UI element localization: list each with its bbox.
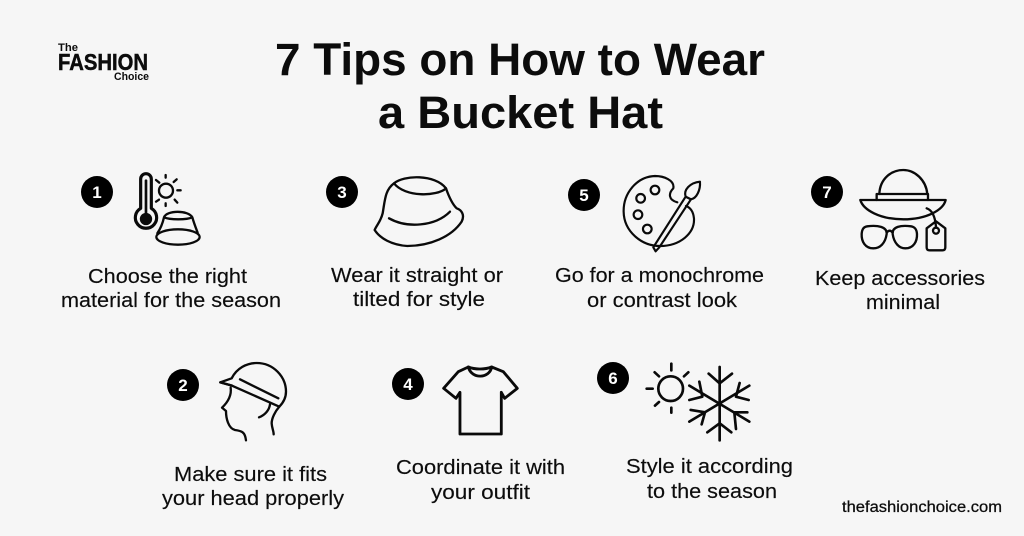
number badge 1 bbox=[81, 176, 113, 208]
logo: The Fashion Choice: FASHION bbox=[58, 49, 148, 75]
label: Make sure it fits bbox=[174, 463, 327, 486]
label: material for the season bbox=[61, 289, 281, 312]
label bbox=[61, 265, 281, 312]
title: a Bucket Hat bbox=[378, 87, 663, 138]
icon: hat, sunglasses and tag bbox=[860, 170, 946, 250]
label: or contrast look bbox=[587, 289, 738, 312]
label: Keep accessories bbox=[815, 267, 985, 290]
label bbox=[331, 264, 503, 311]
label bbox=[396, 456, 565, 504]
icon: t-shirt bbox=[444, 367, 517, 434]
tip 2: make sure it fits bbox=[162, 363, 345, 510]
number badge 6 bbox=[597, 362, 629, 394]
label: Wear it straight or bbox=[331, 264, 503, 287]
label bbox=[162, 463, 345, 510]
tip 1: choose the right material bbox=[61, 174, 281, 312]
number badge 4 bbox=[392, 368, 424, 400]
label: Coordinate it with bbox=[396, 456, 565, 479]
logo: The Fashion Choice: Choice bbox=[114, 71, 149, 83]
label bbox=[626, 455, 793, 503]
number badge 2 bbox=[167, 369, 199, 401]
title: 7 Tips on How to Wear bbox=[275, 34, 765, 85]
label: to the season bbox=[647, 480, 777, 503]
label: your head properly bbox=[162, 487, 345, 510]
tip 4: coordinate with outfit bbox=[392, 367, 565, 504]
label bbox=[815, 267, 985, 314]
number badge 2: 2 bbox=[178, 376, 188, 395]
number badge 6: 6 bbox=[608, 369, 618, 388]
icon: bucket hat bbox=[375, 177, 463, 246]
label: Go for a monochrome bbox=[555, 264, 764, 287]
icon: paint palette and brush bbox=[624, 176, 700, 251]
label: Choose the right bbox=[88, 265, 247, 288]
number badge 5 bbox=[568, 179, 600, 211]
number badge 7: 7 bbox=[822, 183, 832, 202]
label: minimal bbox=[866, 291, 940, 314]
icon: sun and snowflake bbox=[647, 364, 749, 440]
label: tilted for style bbox=[353, 288, 485, 311]
label: Style it according bbox=[626, 455, 793, 478]
number badge 1: 1 bbox=[92, 183, 102, 202]
number badge 3 bbox=[326, 176, 358, 208]
number badge 4: 4 bbox=[403, 375, 413, 394]
number badge 5: 5 bbox=[579, 186, 589, 205]
logo: The Fashion Choice: The bbox=[58, 42, 78, 54]
icon: thermometer, sun and bucket hat bbox=[135, 174, 200, 245]
logo: The Fashion Choice bbox=[58, 42, 149, 83]
title bbox=[275, 34, 765, 138]
label: your outfit bbox=[431, 481, 530, 504]
tip 6: style according to season bbox=[597, 362, 793, 503]
icon: head wearing hat bbox=[220, 363, 286, 440]
tip 7: keep accessories minimal bbox=[811, 170, 985, 314]
tip 3: wear it straight or tilted bbox=[326, 176, 503, 311]
label bbox=[555, 264, 764, 312]
number badge 7 bbox=[811, 176, 843, 208]
website url: thefashionchoice.com bbox=[842, 499, 1002, 516]
tip 5: monochrome or contrast bbox=[555, 176, 764, 312]
number badge 3: 3 bbox=[337, 183, 347, 202]
